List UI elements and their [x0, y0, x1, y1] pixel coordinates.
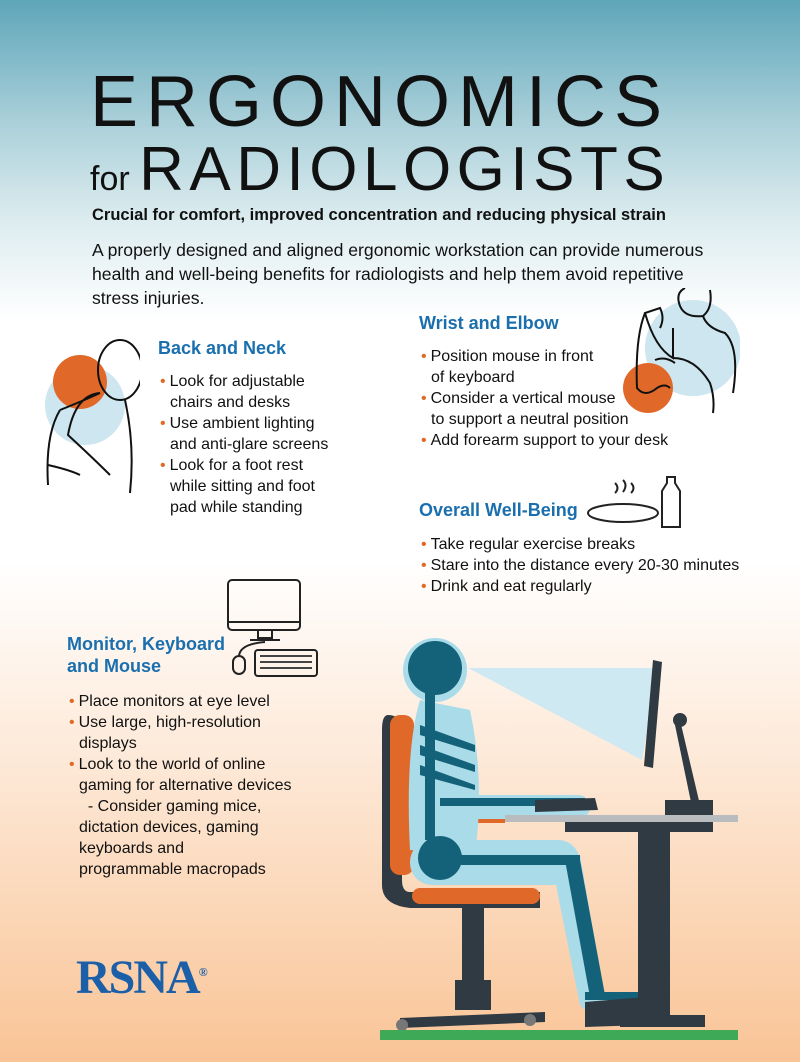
- panel: monitor, keyboard and mouse: Place monitors at eye level: [79, 693, 270, 710]
- panel: monitor, keyboard and mouse: keyboards and: [79, 840, 184, 857]
- panel: overall well-being: [419, 500, 739, 595]
- panel: monitor, keyboard and mouse: Use large, high-resolution: [79, 714, 261, 731]
- desk: [505, 815, 738, 1027]
- panel: wrist and elbow: Position mouse in front: [431, 348, 593, 365]
- chair: [382, 715, 545, 1031]
- panel: monitor, keyboard and mouse: - Consider gaming mice,: [88, 798, 261, 815]
- panel: wrist and elbow: to support a neutral position: [431, 411, 628, 428]
- panel: monitor, keyboard and mouse: [67, 634, 292, 878]
- panel: overall well-being: Take regular exercise breaks: [431, 536, 635, 553]
- panel: monitor, keyboard and mouse: displays: [79, 735, 137, 752]
- panel: monitor, keyboard and mouse: gaming for alternative devices: [79, 777, 292, 794]
- panel: back and neck: Look for a foot rest while sitting and foot pad while standing: [170, 457, 315, 516]
- panel: back and neck: [158, 338, 328, 516]
- icon: food and bottle: [587, 476, 681, 528]
- panel: wrist and elbow: Wrist and Elbow: [419, 313, 559, 333]
- panel: monitor, keyboard and mouse: Monitor, Keyboard: [67, 634, 225, 654]
- logo: RSNA: RSNA®: [76, 951, 206, 1004]
- icon: wrist and elbow: [623, 288, 740, 414]
- body: [403, 638, 642, 1010]
- title: for RADIOLOGISTS: [90, 135, 670, 204]
- panel: overall well-being: Drink and eat regularly: [431, 578, 592, 595]
- icon: computer: [227, 579, 318, 677]
- panel: back and neck: Use ambient lighting and anti-glare screens: [170, 415, 328, 453]
- panel: back and neck: Look for adjustable chairs and desks: [170, 373, 305, 411]
- title: ERGONOMICS: [90, 62, 670, 142]
- panel: monitor, keyboard and mouse: dictation devices, gaming: [79, 819, 259, 836]
- panel: monitor, keyboard and mouse: Look to the world of online: [79, 756, 265, 773]
- intro text: A properly designed and aligned ergonomic workstation can provide numerous health and well-being benefits for radiologists and help them avoid repetitive stress injuries.: [92, 240, 703, 308]
- title: [90, 62, 670, 204]
- subtitle: Crucial for comfort, improved concentration and reducing physical strain: [92, 206, 666, 224]
- panel: monitor, keyboard and mouse: and Mouse: [67, 656, 161, 676]
- panel: wrist and elbow: Add forearm support to your desk: [431, 432, 668, 449]
- panel: overall well-being: Overall Well-Being: [419, 500, 578, 520]
- panel: overall well-being: Stare into the distance every 20-30 minutes: [431, 557, 739, 574]
- monitor: [535, 660, 713, 815]
- panel: wrist and elbow: Consider a vertical mouse: [431, 390, 616, 407]
- panel: back and neck: Back and Neck: [158, 338, 286, 358]
- panel: wrist and elbow: [419, 313, 668, 449]
- icon: back and neck: [45, 339, 140, 494]
- illustration: workstation: [380, 638, 738, 1040]
- panel: wrist and elbow: of keyboard: [431, 369, 515, 386]
- panel: monitor, keyboard and mouse: programmable macropads: [79, 861, 266, 878]
